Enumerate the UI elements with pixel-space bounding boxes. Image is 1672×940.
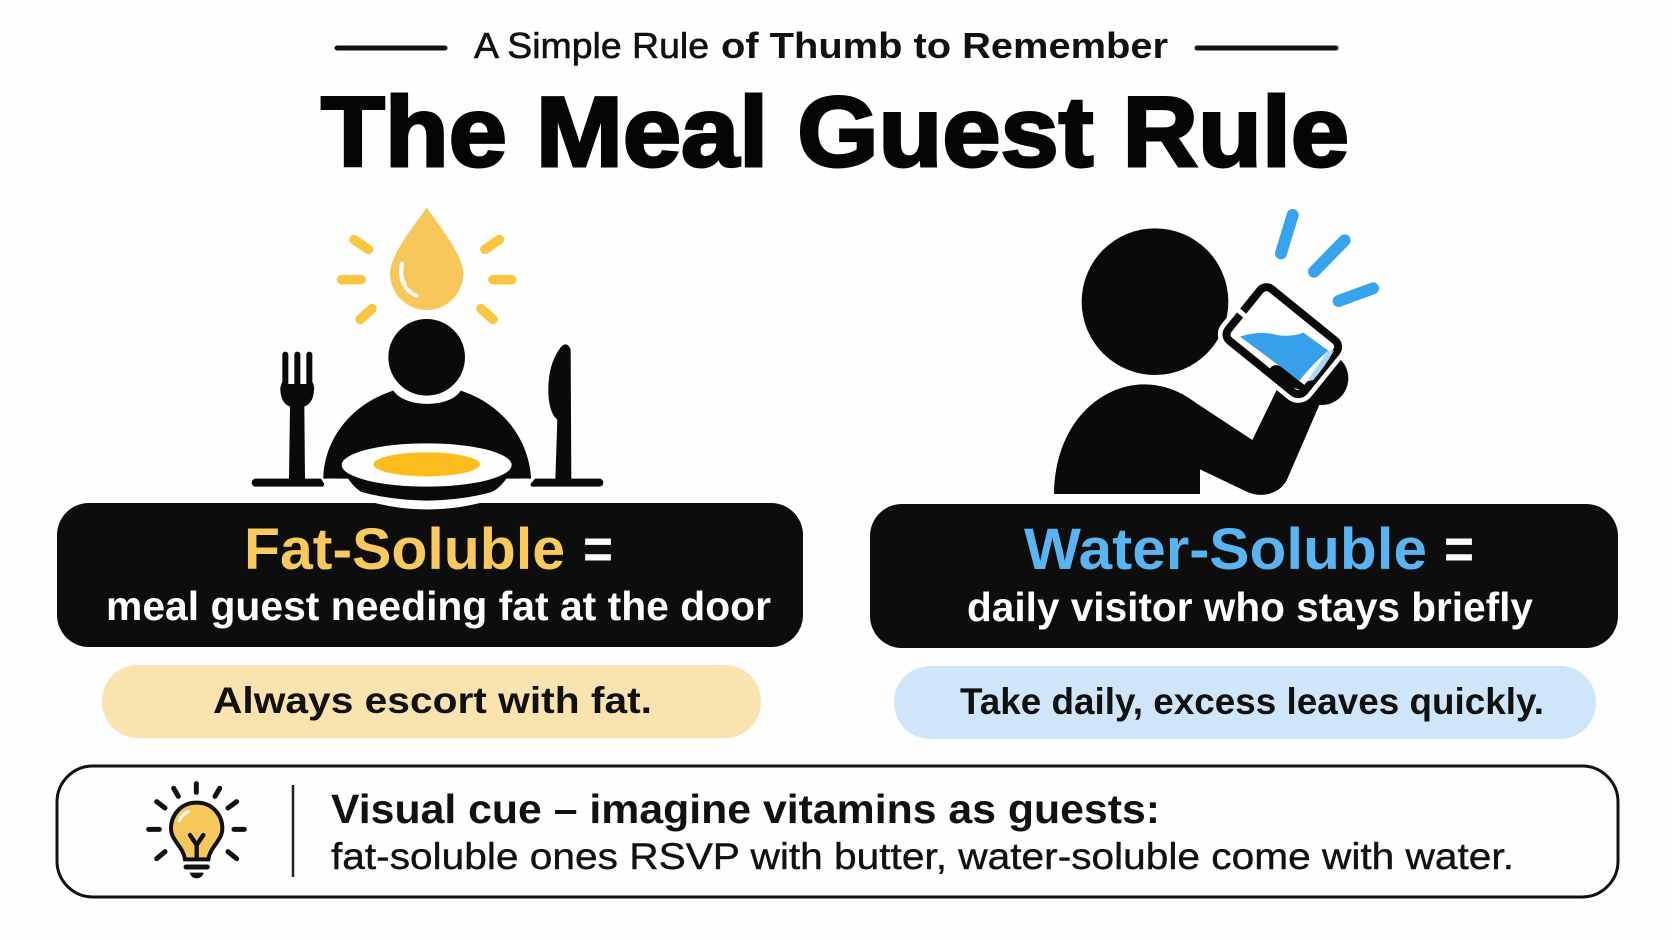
fat-soluble description: meal guest needing fat at the door [106, 583, 771, 629]
icon: water glass [1223, 284, 1341, 397]
water-soluble description: daily visitor who stays briefly [967, 584, 1533, 630]
pill: take daily [894, 666, 1596, 739]
panel: fat-soluble [57, 503, 803, 647]
pill: always escort with fat [102, 665, 761, 738]
eyebrow heading [474, 25, 1168, 66]
pill: take daily: Take daily, excess leaves quickly. [960, 681, 1544, 722]
drinker body and arm [1054, 384, 1320, 495]
fat-soluble heading: Fat-Soluble [244, 517, 565, 582]
fat-soluble heading: = [583, 517, 613, 582]
callout body: fat-soluble ones RSVP with butter, water-soluble come with water. [331, 836, 1514, 877]
table line left [252, 479, 326, 487]
icon: person at meal with fat drop [252, 207, 603, 510]
diner head [388, 319, 465, 396]
panel: water-soluble [870, 504, 1618, 648]
water-soluble heading: Water-Soluble [1024, 517, 1427, 582]
icon: knife [548, 344, 571, 479]
eyebrow heading: A Simple Rule [474, 25, 709, 66]
plate [313, 443, 540, 510]
diner body [323, 391, 531, 479]
drinker head [1082, 228, 1228, 375]
eyebrow heading: of Thumb to Remember [721, 25, 1168, 66]
water splash rays [1281, 215, 1373, 301]
icon: fat drop [390, 207, 463, 310]
icon: light bulb [149, 784, 244, 878]
water-soluble heading: = [1444, 517, 1474, 582]
drinker hand [1295, 352, 1348, 405]
drop rays [342, 240, 512, 319]
plate notch [375, 503, 480, 510]
title: The Meal Guest Rule [321, 76, 1349, 187]
icon: fork [280, 352, 314, 479]
table line right [528, 479, 603, 487]
callout: visual cue [57, 766, 1618, 897]
pill: always escort with fat: Always escort with fat. [213, 680, 652, 721]
callout heading: Visual cue – imagine vitamins as guests: [331, 786, 1160, 832]
icon: person drinking water [1054, 215, 1373, 495]
